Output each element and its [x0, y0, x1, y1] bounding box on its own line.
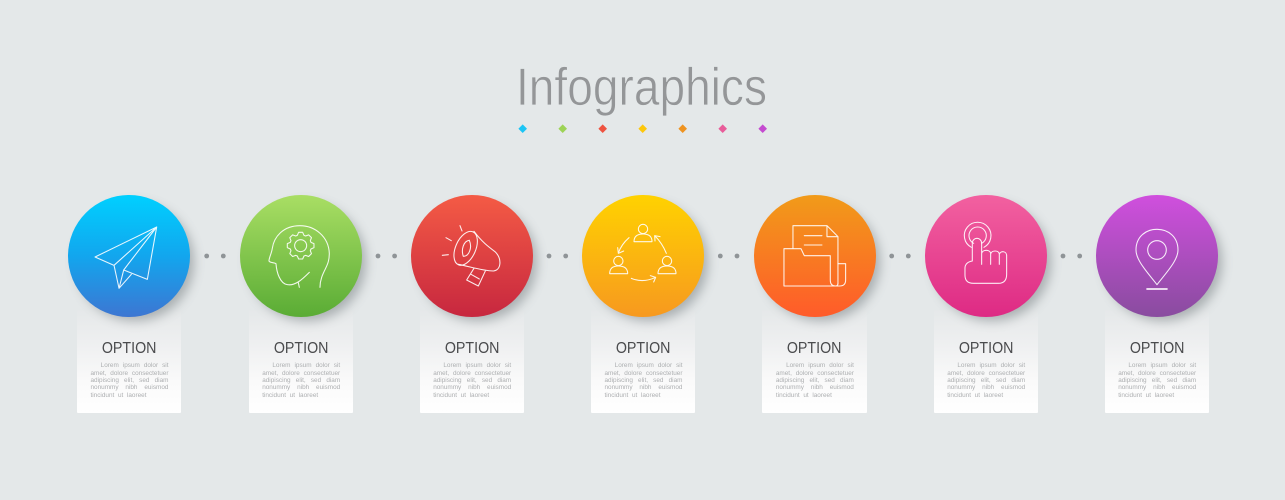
text card 6: amet, dolore consectetuer [947, 370, 1025, 377]
text card 1: tincidunt ut laoreet [90, 392, 146, 399]
text card 2: adipiscing elit, sed diam [262, 377, 340, 384]
connector dots [204, 254, 1082, 258]
text card 4: amet, dolore consectetuer [604, 370, 682, 377]
text card 4: nonummy nibh euismod [604, 384, 682, 391]
panel: step 2 head with gear [240, 195, 372, 413]
text card 3: OPTION [445, 340, 499, 357]
text card 5: amet, dolore consectetuer [776, 370, 854, 377]
text card 2: OPTION [274, 340, 328, 357]
text card 6: adipiscing elit, sed diam [947, 377, 1025, 384]
text card 2 [249, 310, 353, 412]
text card 3: tincidunt ut laoreet [433, 392, 489, 399]
panel: step 4 team cycle [582, 195, 714, 413]
text card 6: Lorem ipsum dolor sit [957, 362, 1025, 369]
text card 7: nonummy nibh euismod [1118, 384, 1196, 391]
panel: step 5 folder [754, 195, 886, 413]
text card 7: amet, dolore consectetuer [1118, 370, 1196, 377]
text card 3: adipiscing elit, sed diam [433, 377, 511, 384]
text card 3: Lorem ipsum dolor sit [443, 362, 511, 369]
circle and megaphone icon [411, 195, 542, 326]
text card 7: adipiscing elit, sed diam [1118, 377, 1196, 384]
text card 5: nonummy nibh euismod [776, 384, 854, 391]
circle and paper plane icon [68, 195, 200, 326]
text card 1: amet, dolore consectetuer [90, 370, 168, 377]
text card 7: tincidunt ut laoreet [1118, 392, 1174, 399]
text card 3: amet, dolore consectetuer [433, 370, 511, 377]
text card 2: amet, dolore consectetuer [262, 370, 340, 377]
circle and folder icon [754, 195, 886, 326]
circle and hand icon [925, 195, 1056, 326]
text card 5: tincidunt ut laoreet [776, 392, 832, 399]
text card 6: tincidunt ut laoreet [947, 392, 1003, 399]
text card 4: tincidunt ut laoreet [604, 392, 660, 399]
text card 4: OPTION [616, 340, 670, 357]
text card 1: Lorem ipsum dolor sit [101, 362, 168, 369]
text card 2: Lorem ipsum dolor sit [272, 362, 340, 369]
text card 7 [1105, 310, 1209, 412]
panel: step 7 map pin [1096, 195, 1228, 413]
text card 1: adipiscing elit, sed diam [90, 377, 168, 384]
text card 6 [934, 310, 1038, 412]
text card 5 [762, 310, 867, 412]
colour diamond row [518, 124, 767, 133]
circle and team icon [582, 195, 714, 326]
panel: step 3 megaphone [411, 195, 542, 413]
text card 4: Lorem ipsum dolor sit [615, 362, 682, 369]
circle and head icon [240, 195, 372, 326]
text card 1: OPTION [102, 340, 156, 357]
text card 3: nonummy nibh euismod [433, 384, 511, 391]
panel: step 6 pointing hand [925, 195, 1056, 413]
text card 2: nonummy nibh euismod [262, 384, 340, 391]
text card 2: tincidunt ut laoreet [262, 392, 318, 399]
text card 6: OPTION [959, 340, 1013, 357]
text card 7: OPTION [1130, 340, 1184, 357]
text card 5: Lorem ipsum dolor sit [786, 362, 854, 369]
circle and map pin icon [1096, 195, 1228, 326]
text card 7: Lorem ipsum dolor sit [1128, 362, 1196, 369]
text card 1: nonummy nibh euismod [90, 384, 168, 391]
panel: step 1 paper plane [68, 195, 200, 413]
text card 5: adipiscing elit, sed diam [776, 377, 854, 384]
text card 6: nonummy nibh euismod [947, 384, 1025, 391]
text card 3 [420, 310, 524, 412]
text card 4 [591, 310, 695, 412]
text card 4: adipiscing elit, sed diam [604, 377, 682, 384]
text card 5: OPTION [787, 340, 842, 357]
text card 1 [77, 310, 181, 412]
